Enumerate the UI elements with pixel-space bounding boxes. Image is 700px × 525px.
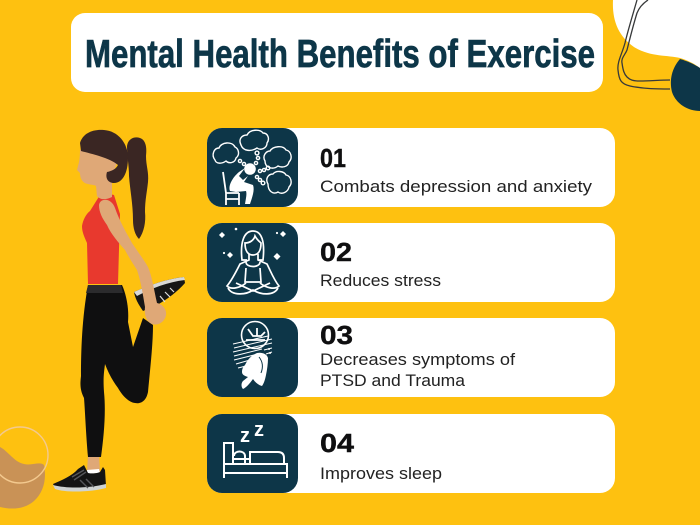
card 01 (207, 128, 615, 207)
label: PTSD and Trauma (320, 371, 466, 390)
sock (87, 469, 100, 474)
icon panel: depressed person with thought clouds (207, 128, 298, 207)
icon panel: bed with sleep letters: z (254, 419, 264, 441)
ponytail (127, 137, 148, 239)
standing ankle (87, 455, 100, 472)
card 03 (207, 318, 615, 397)
waistband (86, 285, 123, 293)
leggings (80, 285, 153, 457)
label: Reduces stress (320, 271, 441, 290)
number: 04 (320, 428, 355, 458)
illustration: woman stretching (53, 130, 185, 492)
card 04 (207, 414, 615, 493)
icon panel: meditating woman (207, 223, 298, 302)
label: Combats depression and anxiety (320, 177, 593, 196)
decoration: top right shapes (613, 0, 700, 111)
card 02 (207, 223, 615, 302)
label: Improves sleep (320, 464, 442, 483)
icon panel: curled figure with trauma memory (207, 318, 298, 397)
neck and face (77, 146, 118, 199)
icon panel: bed with sleep letters: z (240, 425, 250, 447)
hair (80, 130, 128, 183)
label: Decreases symptoms of (320, 350, 515, 369)
decoration: bottom left blob and ring (0, 427, 48, 509)
arm and hand (99, 200, 166, 325)
raised shoe (134, 277, 185, 311)
icon panel: bed with sleep letters (207, 414, 298, 493)
standing shoe (53, 465, 106, 492)
number: 01 (320, 143, 346, 173)
tank top (82, 194, 120, 284)
title banner (71, 13, 603, 92)
number: 02 (320, 237, 352, 267)
number: 03 (320, 320, 353, 350)
